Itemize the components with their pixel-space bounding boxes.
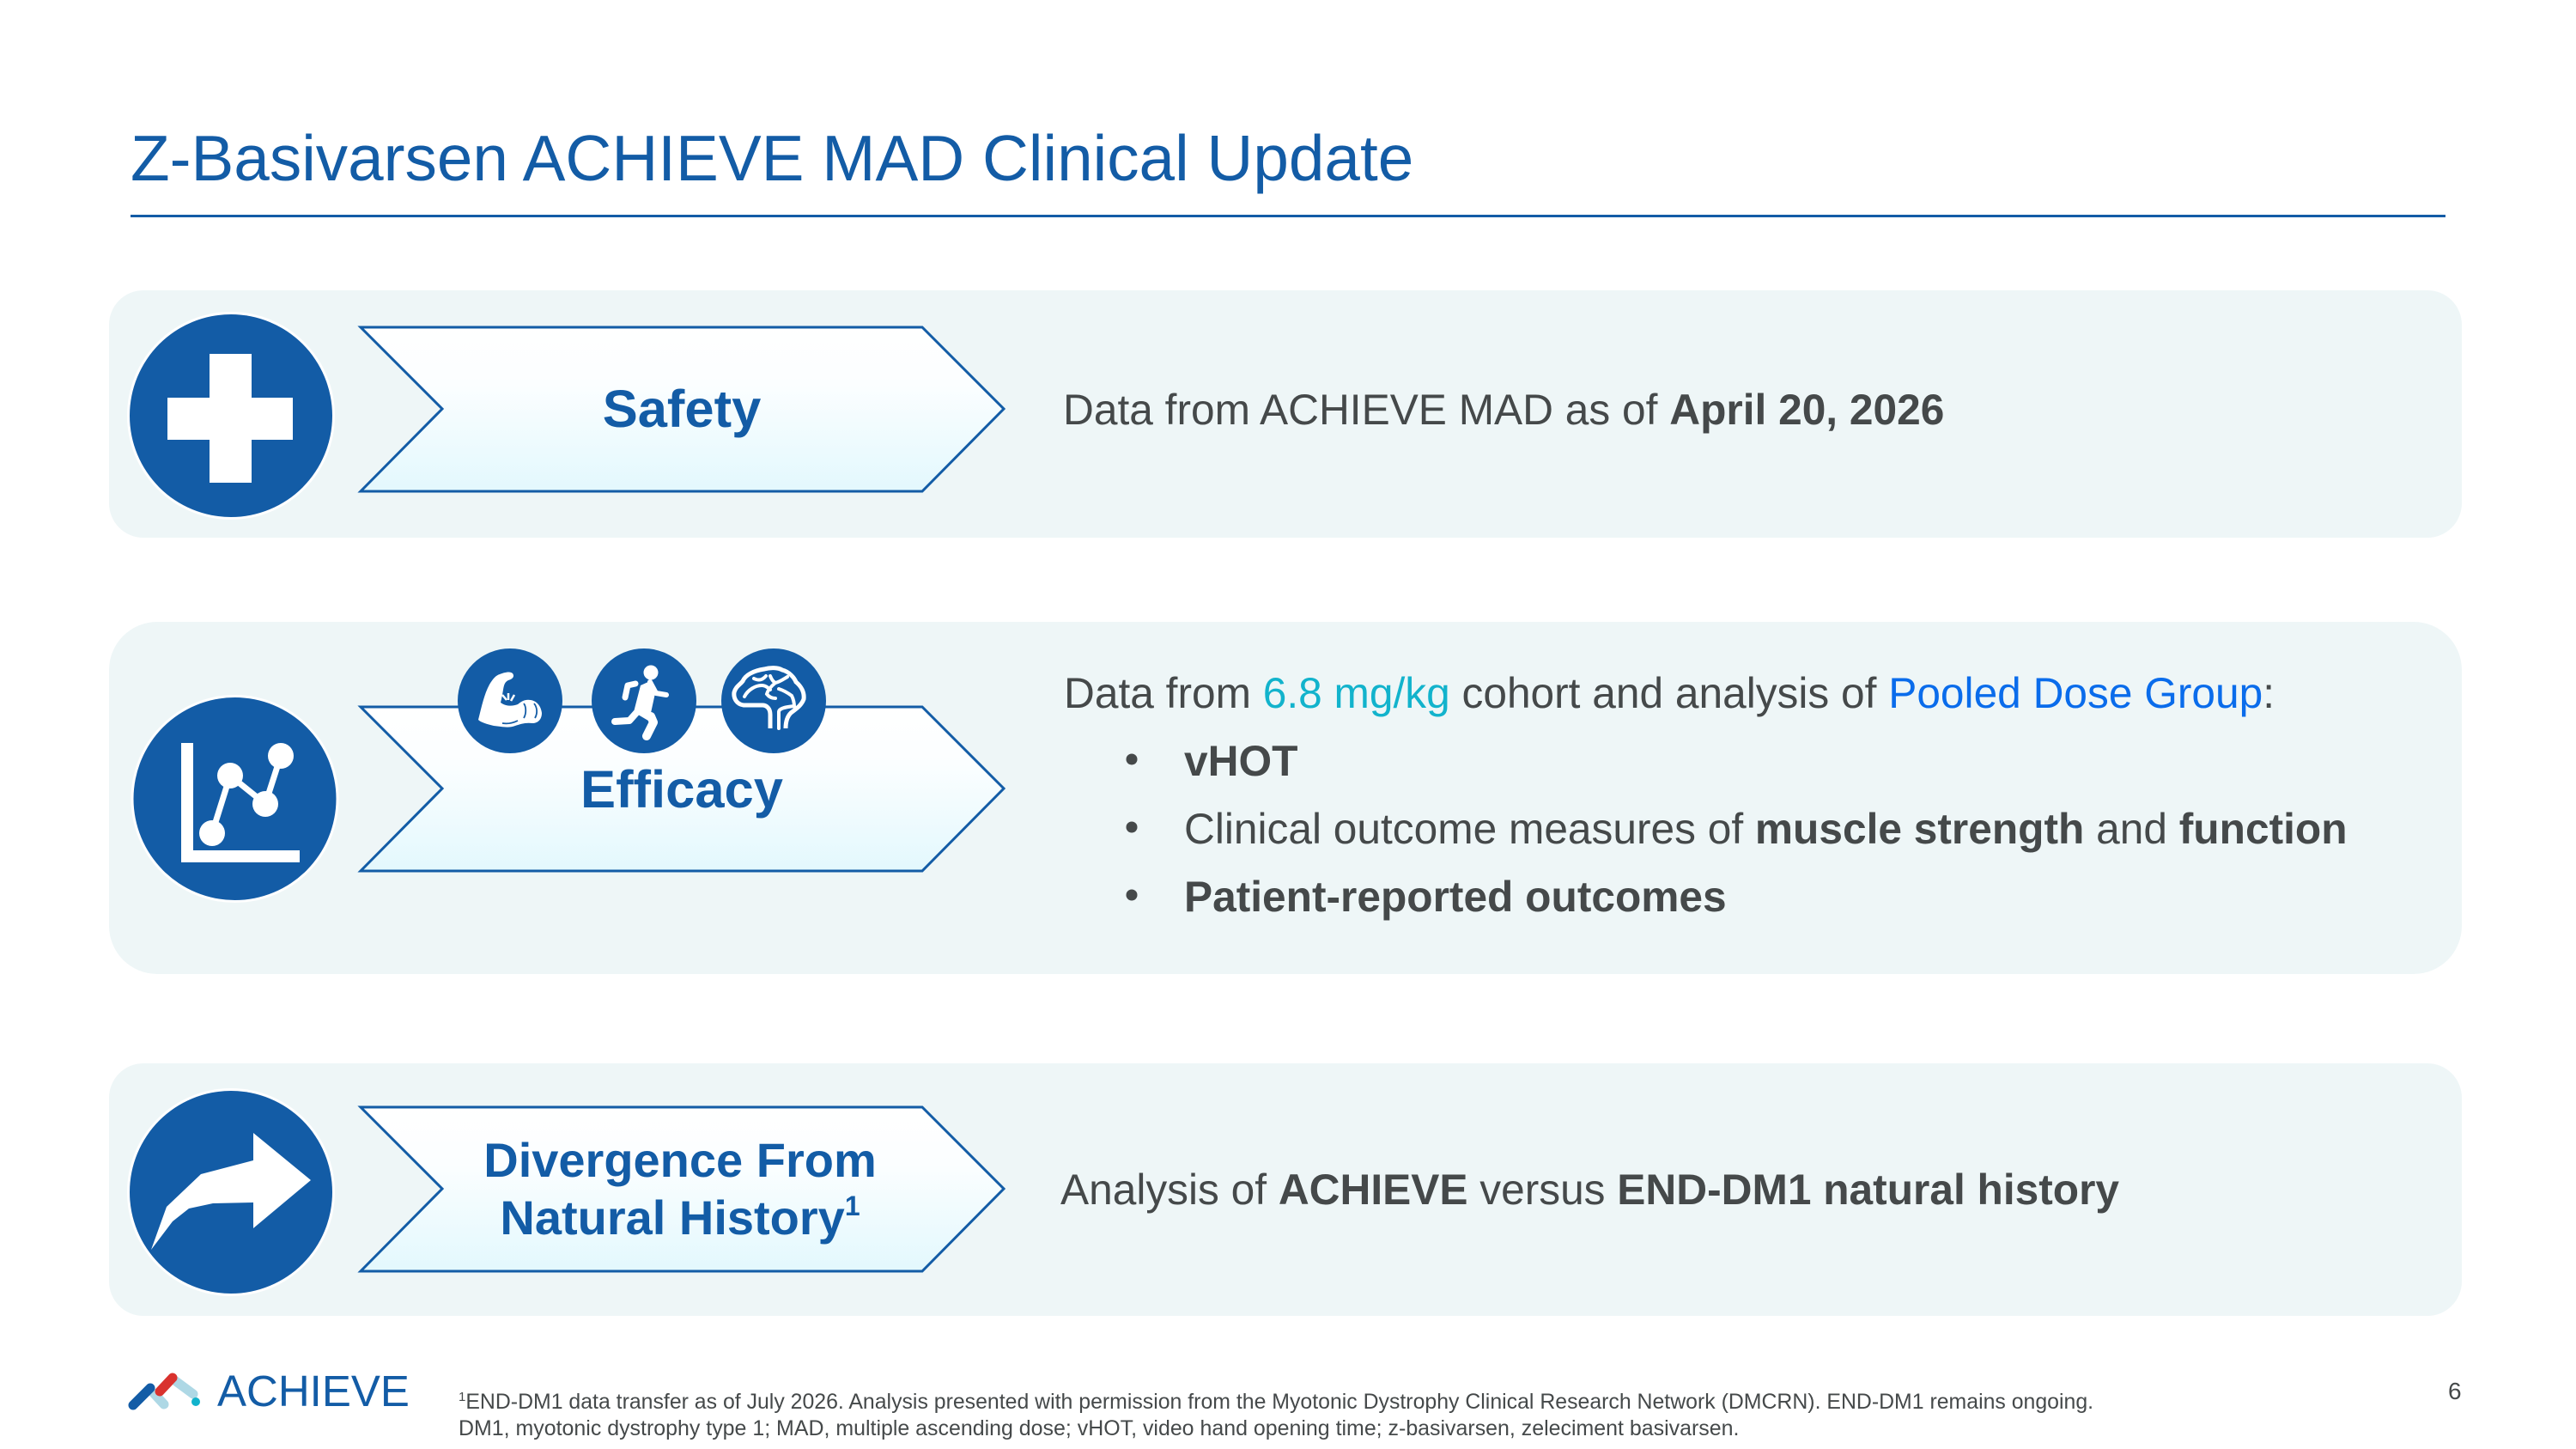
icon: medical cross	[127, 312, 335, 520]
heading: efficacy: Efficacy	[580, 760, 783, 819]
page number: 6	[2448, 1378, 2462, 1404]
logo: ACHIEVE	[133, 1367, 410, 1416]
icon: curved arrow	[127, 1088, 335, 1296]
icon: line chart	[131, 695, 338, 903]
text: efficacy intro: Data from 6.8 mg/kg cohort and analysis of Pooled Dose Group:	[1064, 669, 2275, 717]
chevron: efficacy	[361, 707, 1004, 871]
title: Z-Basivarsen ACHIEVE MAD Clinical Update	[131, 122, 1413, 194]
heading: divergence: Divergence From	[483, 1133, 877, 1187]
panel: efficacy	[109, 622, 2462, 974]
footnote: 1	[459, 1390, 465, 1404]
bullet list: vHOT	[1184, 737, 1297, 785]
footnote: DM1, myotonic dystrophy type 1; MAD, multiple ascending dose; vHOT, video hand opening time; z-basivarsen, zeleciment basivarsen.	[459, 1416, 1739, 1440]
footnote: END-DM1 data transfer as of July 2026. Analysis presented with permission from the Myotonic Dystrophy Clinical Research Network (DMCRN). END-DM1 remains ongoing.	[465, 1391, 2093, 1414]
icon: running person	[592, 648, 696, 753]
panel: divergence	[109, 1063, 2462, 1316]
heading: safety: Safety	[603, 380, 761, 439]
icon: flexed muscle	[458, 648, 562, 753]
footnote	[459, 1390, 2093, 1440]
bullet list: Clinical outcome measures of muscle strength and function	[1184, 805, 2348, 853]
panel: divergence: 1	[845, 1190, 860, 1221]
panel: safety	[109, 290, 2462, 538]
icon: brain	[721, 648, 826, 753]
chevron: divergence	[361, 1107, 1004, 1271]
bullet list	[1127, 737, 2348, 921]
bullet list: Patient-reported outcomes	[1184, 873, 1727, 921]
text: divergence analysis: Analysis of ACHIEVE versus END-DM1 natural history	[1060, 1166, 2119, 1214]
panel: divergence: Natural History	[500, 1190, 845, 1245]
text: safety data: Data from ACHIEVE MAD as of April 20, 2026	[1063, 386, 1944, 434]
logo: ACHIEVE: ACHIEVE	[217, 1367, 410, 1416]
chevron: safety	[361, 327, 1004, 491]
